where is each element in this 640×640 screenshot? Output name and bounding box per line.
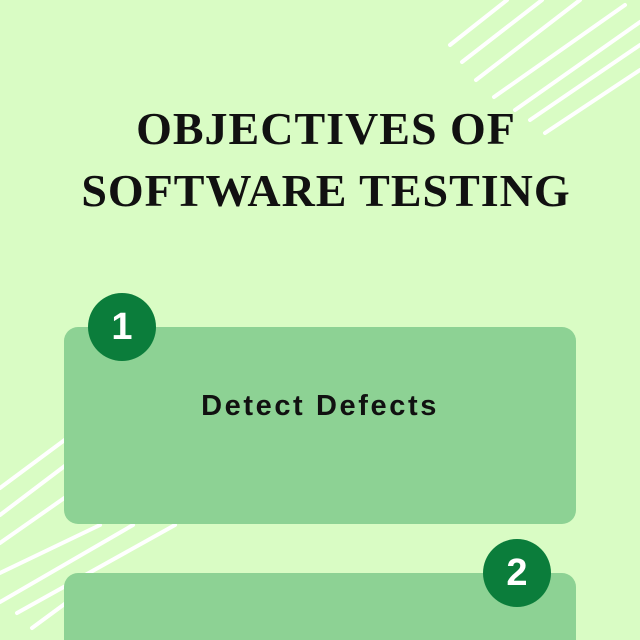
title: SOFTWARE TESTING [81,165,571,216]
panel: objective 2 [64,573,576,640]
title: OBJECTIVES OF [136,103,516,154]
badge 1: 1 [111,306,133,348]
badge 2: 2 [506,552,528,594]
panel: objective 1 [64,327,576,524]
badge 1 [88,293,156,361]
title [81,103,571,216]
badge 2 [483,539,551,607]
text: Detect Defects: Detect Defects [201,390,439,422]
